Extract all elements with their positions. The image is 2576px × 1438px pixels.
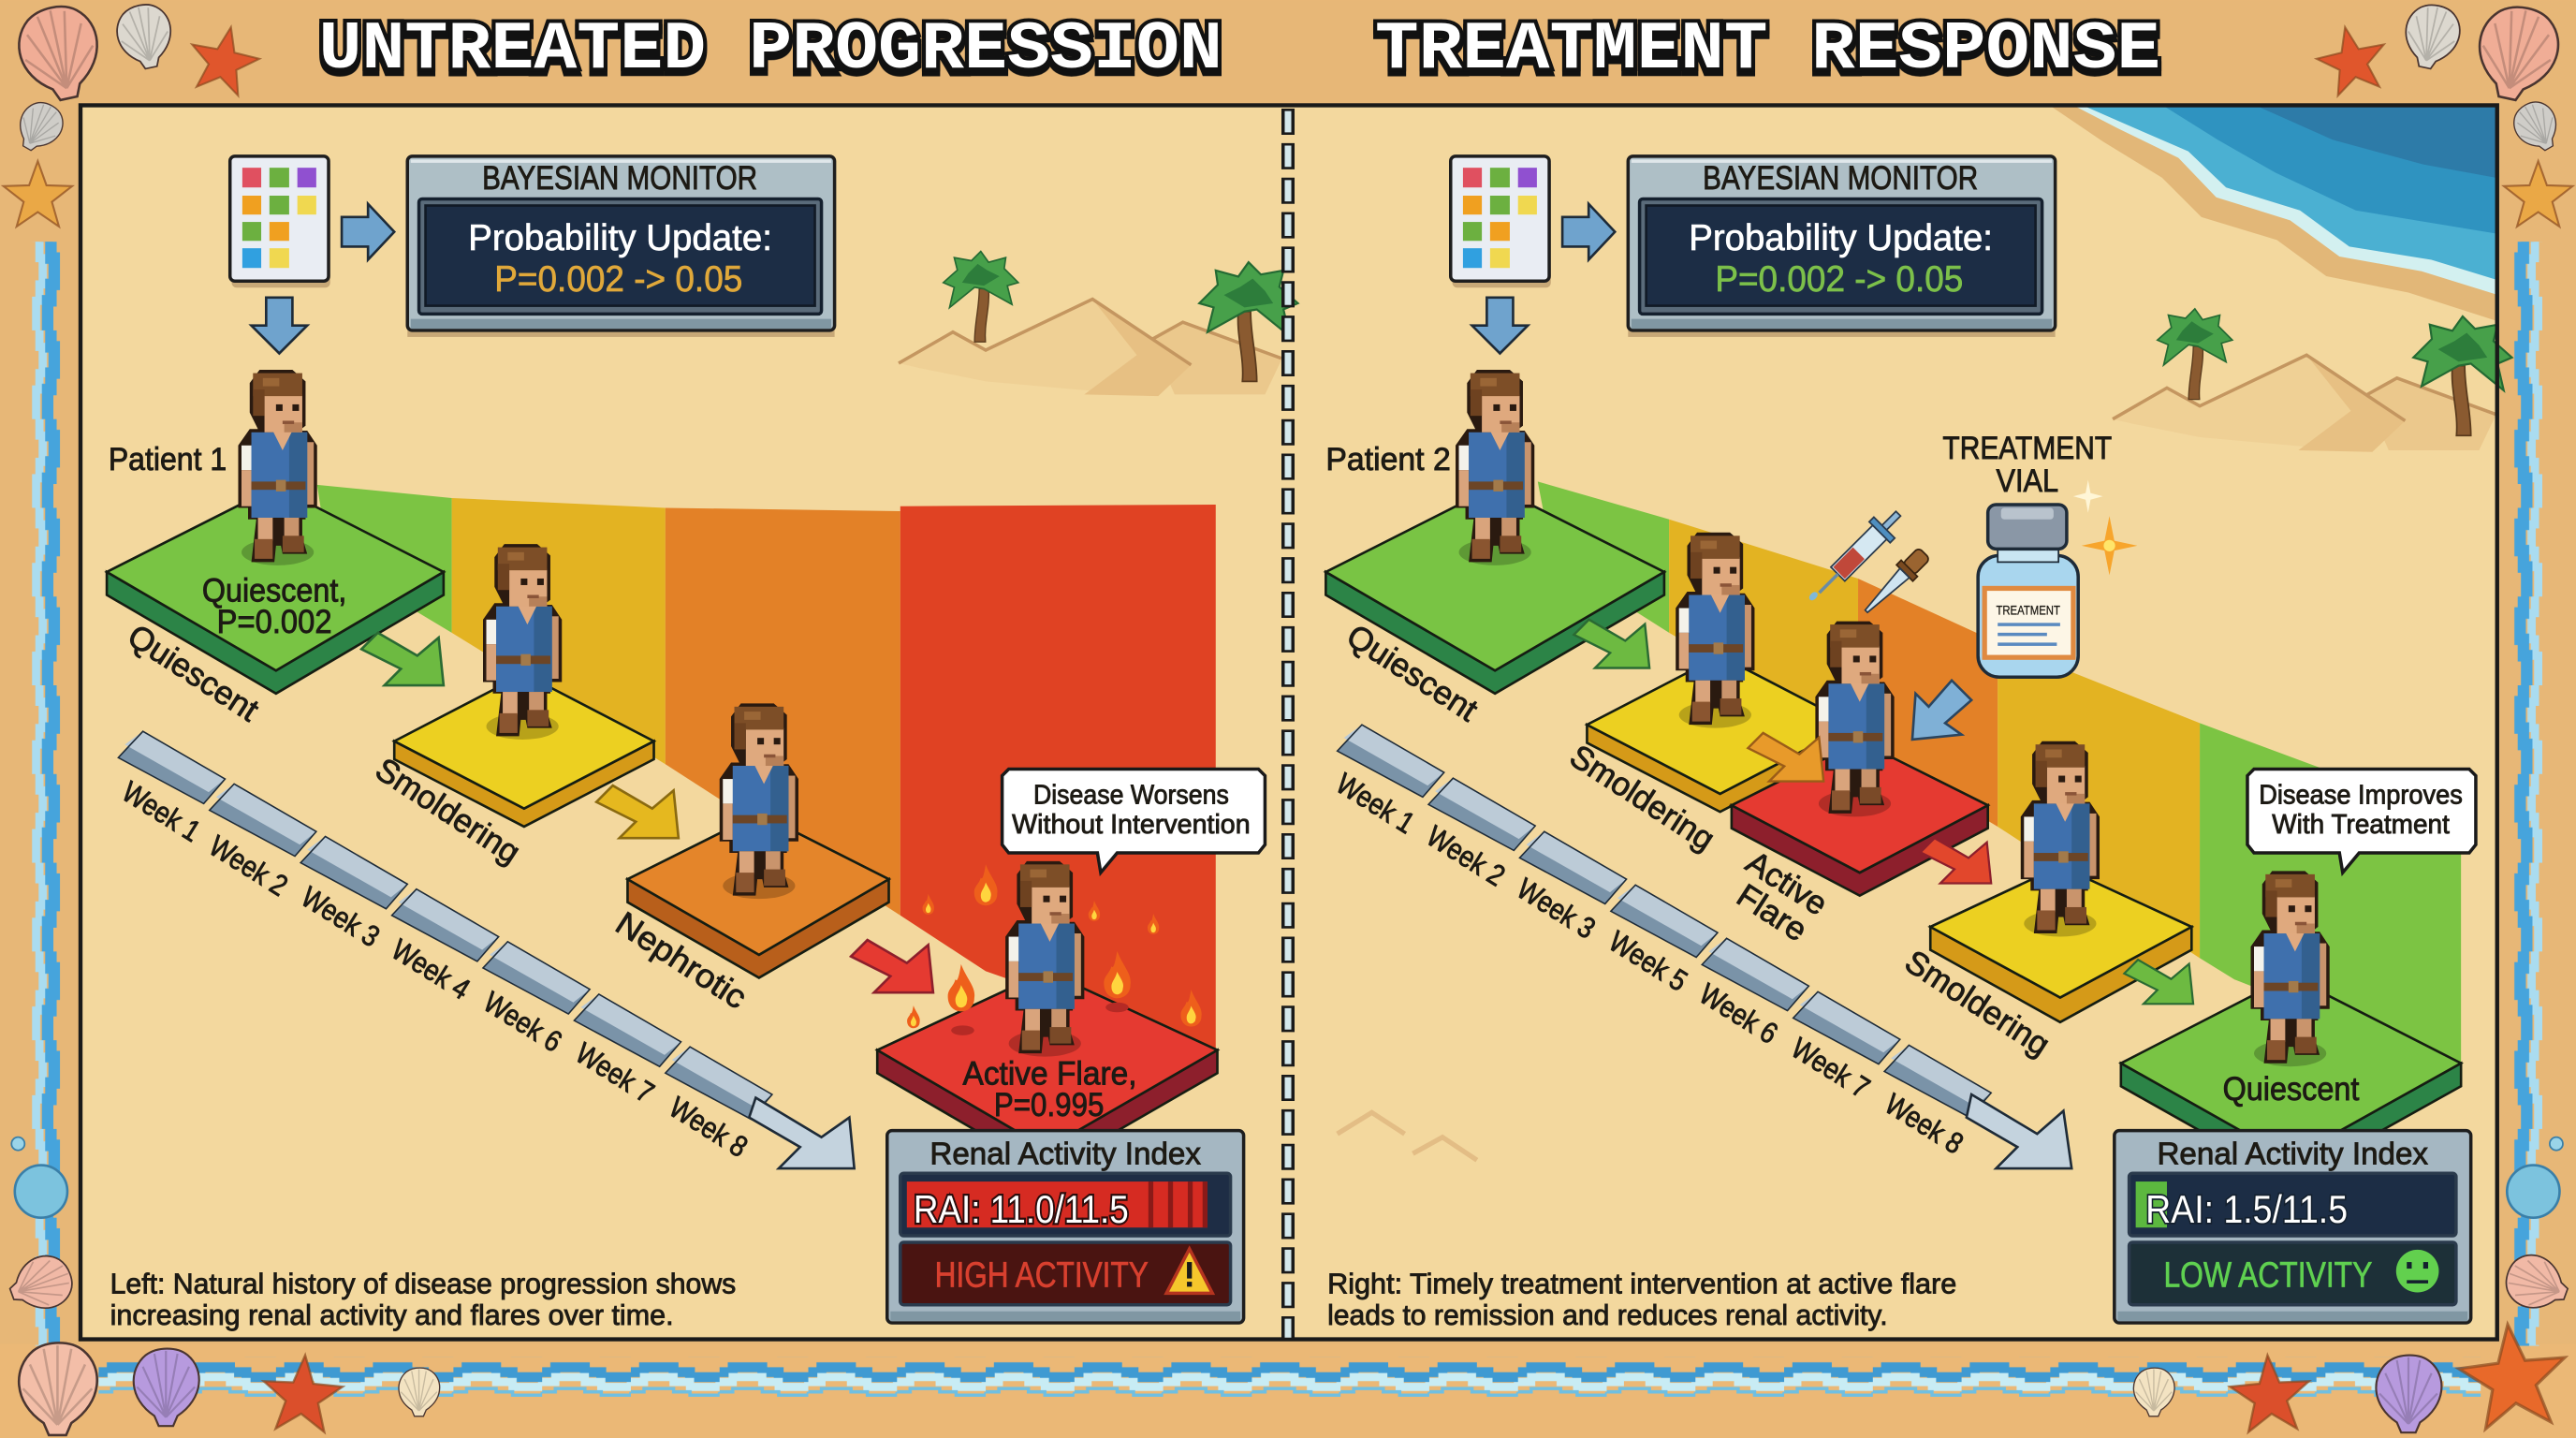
platform: quiescent end, right [2121, 976, 2461, 1181]
caption: left panel: Left: Natural history of disease progression shows [110, 1267, 736, 1299]
diagonal stage label: active flare, right: Active [1739, 844, 1834, 923]
week labels: left: Week 2 [203, 829, 294, 902]
patient 1 at nephrotic stage [720, 703, 798, 899]
left water border [24, 242, 64, 1346]
icon: smiley [2396, 1250, 2438, 1293]
bottom sand strip [0, 1344, 2576, 1438]
transition arrow: orange, right [1748, 733, 1823, 782]
activity bar: right [2130, 1173, 2456, 1236]
icon: treatment vial [1978, 505, 2078, 677]
transition arrow: yellow, left [596, 785, 679, 838]
panel heading: left: Renal Activity Index [929, 1137, 1201, 1172]
diagonal stage label: nephrotic, left: Nephrotic [609, 905, 753, 1016]
flames around the patient [907, 864, 1202, 1028]
right water border [2510, 242, 2550, 1346]
monitoring grid icon: right [1451, 156, 1551, 287]
week labels: left: Week 7 [570, 1035, 660, 1109]
treatment arrow pointing to active flare [1912, 681, 1971, 740]
platform: smoldering, right [1587, 655, 1853, 812]
arrow: grid to monitor, left [342, 204, 394, 259]
probability value: left: P=0.002 -> 0.05 [494, 259, 742, 300]
bayesian monitor: right [1628, 156, 2056, 337]
label: treatment vial: TREATMENT [1942, 431, 2112, 466]
panel heading: right: Renal Activity Index [2157, 1137, 2428, 1172]
icon: dropper [1858, 545, 1933, 620]
monitor screen: left [419, 199, 822, 314]
decorative shells and starfish: bottom [19, 1319, 2571, 1435]
monitor heading: right: BAYESIAN MONITOR [1703, 160, 1978, 197]
monitor screen: right [1640, 199, 2042, 314]
week labels: right [1330, 766, 1969, 1161]
icon: warning triangle [1166, 1249, 1212, 1293]
label: active flare with probability: Active Flare, [962, 1056, 1137, 1093]
week labels: right: Week 6 [1693, 976, 1784, 1050]
week labels: left [116, 774, 754, 1164]
activity bar: left: RAI: 11.0/11.5 [914, 1187, 1129, 1231]
caption: right panel: leads to remission and reduces renal activity. [1327, 1299, 1888, 1331]
week labels: left: Week 6 [477, 985, 568, 1059]
caption: right panel: Right: Timely treatment intervention at active flare [1327, 1267, 1956, 1299]
decorative shells and starfish: top right [2311, 0, 2575, 1318]
icon: syringe [1801, 504, 1909, 611]
dunes and palms: right panel [2113, 309, 2512, 452]
label: active flare with probability: P=0.995 [994, 1087, 1104, 1123]
high activity status [900, 1242, 1231, 1305]
diagonal stage label: active flare, right [1731, 844, 1834, 948]
week labels: right: Week 3 [1511, 872, 1602, 946]
monitoring grid icon: left [230, 156, 330, 287]
platform: smoldering, left [394, 674, 654, 827]
renal activity panel: left [887, 1131, 1244, 1323]
bottom water border [98, 1357, 2481, 1397]
caption: left panel: increasing renal activity and flares over time. [110, 1299, 674, 1331]
probability value: right: P=0.002 -> 0.05 [1715, 259, 1963, 300]
patient 2 at smoldering stage [1676, 533, 1754, 728]
transition arrow: red, left [851, 940, 933, 992]
speech bubble: disease improves [2247, 770, 2476, 873]
beach with ocean in the right panel corner [2052, 107, 2496, 320]
platform: quiescent start, right [1325, 487, 1664, 694]
renal activity panel: right [2115, 1131, 2471, 1323]
timeline: left [118, 731, 855, 1168]
activity bar: right: RAI: 1.5/11.5 [2145, 1187, 2348, 1231]
label: quiescent end platform: Quiescent [2223, 1071, 2360, 1108]
speech bubble: disease worsens: Without Intervention [1012, 810, 1251, 840]
diagonal stage label: smoldering recovery, right: Smoldering [1898, 943, 2056, 1064]
small faint dune: right panel [1338, 1112, 1477, 1160]
patient 1 at quiescent stage [238, 370, 317, 565]
centre divider [1284, 109, 1292, 1338]
week labels: left: Week 4 [386, 932, 476, 1006]
low activity status [2130, 1242, 2456, 1305]
transition arrow: green, right [1573, 620, 1649, 668]
week labels: left: Week 8 [664, 1090, 754, 1164]
patient 2 at active flare [1815, 622, 1895, 816]
speech bubble: disease worsens [1003, 770, 1265, 873]
low activity status: LOW ACTIVITY [2163, 1255, 2372, 1294]
diagonal stage label: quiescent, left: Quiescent [121, 617, 265, 728]
week labels: right: Week 5 [1603, 924, 1693, 998]
speech bubble: disease improves: With Treatment [2272, 810, 2450, 840]
patient 1 at active flare stage [1005, 861, 1084, 1057]
dunes and palms: left panel [899, 251, 1298, 396]
label: patient 2: Patient 2 [1325, 442, 1451, 477]
platform label: quiescent with probability: Quiescent, [202, 573, 346, 609]
platform: smoldering recovery, right [1930, 866, 2191, 1022]
caption: left panel [110, 1267, 736, 1331]
disease ribbon: untreated, worsening [317, 485, 1216, 1051]
week labels: left: Week 3 [296, 879, 386, 953]
patient 2 at smoldering recovery [2021, 741, 2100, 937]
platform: quiescent, left [107, 487, 444, 694]
diagonal stage label: smoldering, left: Smoldering [369, 751, 527, 871]
week labels: right: Week 2 [1421, 819, 1511, 892]
bayesian monitor: left [407, 156, 835, 337]
transition arrow: green recovery, right [2124, 960, 2193, 1004]
timeline: right [1338, 725, 2071, 1168]
icon: treatment vial: TREATMENT [1996, 603, 2060, 618]
title: untreated progression: UNTREATED PROGRESSION [318, 11, 1222, 88]
week labels: left: Week 1 [116, 774, 207, 848]
patient 2 at quiescent start [1456, 370, 1534, 565]
speech bubble: disease worsens: Disease Worsens [1033, 780, 1229, 810]
arrow: grid to patient, left [252, 298, 307, 353]
week labels: right: Week 7 [1786, 1031, 1876, 1105]
label: treatment vial: VIAL [1996, 463, 2058, 499]
platform label: quiescent with probability [202, 573, 346, 640]
platform label: quiescent with probability: P=0.002 [217, 604, 332, 640]
title: treatment response: TREATMENT RESPONSE [1375, 11, 2160, 88]
decorative shells and starfish: top left [3, 0, 265, 1319]
patient 2 at quiescent end [2250, 871, 2330, 1066]
platform: nephrotic, left [627, 814, 889, 977]
diagonal stage label: smoldering, right: Smoldering [1563, 738, 1721, 858]
speech bubble: disease improves: Disease Improves [2259, 780, 2463, 810]
platform: active flare, left [877, 971, 1218, 1172]
activity bar: left [900, 1173, 1231, 1236]
week labels: right: Week 8 [1880, 1087, 1969, 1161]
transition arrow: green, left [361, 633, 444, 685]
diagonal stage label: quiescent, right: Quiescent [1340, 617, 1485, 728]
diagonal stage label: active flare, right: Flare [1731, 877, 1813, 948]
icon: sparkles [2073, 480, 2137, 575]
probability heading: left: Probability Update: [468, 218, 772, 258]
patient 1 at smoldering stage [483, 544, 562, 740]
label: patient 1: Patient 1 [109, 442, 227, 477]
probability heading: right: Probability Update: [1689, 218, 1993, 258]
caption: right panel [1327, 1267, 1956, 1331]
platform: active flare, right [1732, 741, 1988, 896]
high activity status: HIGH ACTIVITY [935, 1255, 1149, 1294]
transition arrow: red, right [1921, 838, 1991, 884]
week labels: right: Week 1 [1330, 766, 1421, 840]
monitor heading: left: BAYESIAN MONITOR [482, 160, 757, 197]
disease ribbon: treated, improving [1538, 481, 2461, 1068]
label: active flare with probability [962, 1056, 1137, 1123]
arrow: grid to patient, right [1472, 298, 1528, 353]
label: treatment vial [1942, 431, 2112, 499]
arrow: grid to monitor, right [1562, 204, 1615, 259]
